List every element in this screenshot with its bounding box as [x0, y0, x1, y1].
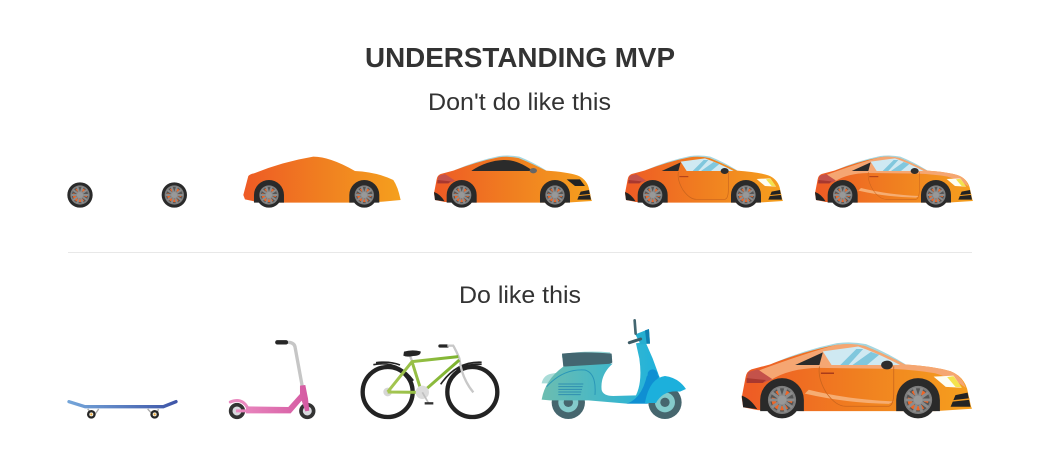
stage 1: two wheels — [67, 182, 187, 208]
stage 3: car with dark window — [434, 155, 592, 208]
skateboard — [69, 402, 176, 419]
stage 4: car with glass and door — [625, 155, 783, 208]
vespa scooter — [542, 320, 686, 419]
stage 5: finished car — [815, 155, 973, 208]
stage 2: car body silhouette — [243, 157, 401, 208]
bicycle — [363, 346, 497, 417]
heading: do like this: Do like this — [459, 282, 581, 309]
kick scooter — [230, 342, 314, 417]
title: UNDERSTANDING MVP — [365, 42, 675, 73]
final car — [742, 342, 972, 418]
heading: don't do like this: Don't do like this — [428, 89, 611, 116]
